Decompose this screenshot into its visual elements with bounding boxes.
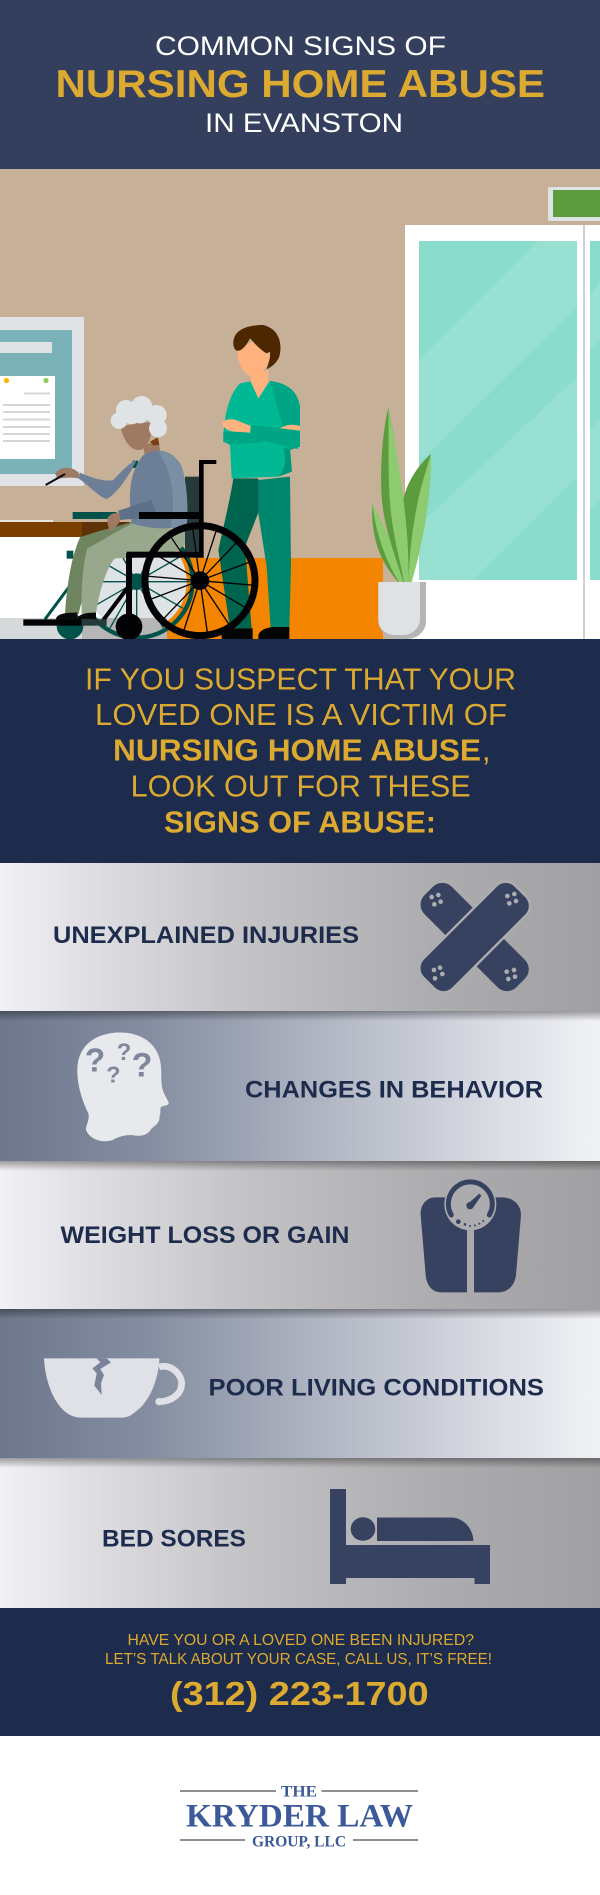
potted plant: [372, 407, 431, 639]
cta line 2: LET’S TALK ABOUT YOUR CASE, CALL US, IT’S FREE!: [105, 1651, 492, 1668]
label: POOR LIVING CONDITIONS: [208, 1375, 544, 1402]
title: common signs of: COMMON SIGNS OF: [155, 31, 446, 61]
desk: [0, 520, 130, 537]
wheelchair large wheel: [145, 526, 255, 636]
title: in evanston: IN EVANSTON: [205, 108, 403, 138]
call to action panel: [0, 1608, 600, 1736]
band: poor living conditions: [0, 1309, 600, 1458]
patient in wheelchair: [46, 396, 200, 619]
band: unexplained injuries: [0, 863, 600, 1011]
window: [405, 225, 600, 639]
label: UNEXPLAINED INJURIES: [53, 922, 359, 949]
notice board: [0, 317, 84, 486]
wheelchair rear wheel: [44, 546, 194, 639]
phone number: (312) 223-1700: [170, 1675, 429, 1712]
title: nursing home abuse: NURSING HOME ABUSE: [56, 63, 545, 106]
intro text line 5: SIGNS OF ABUSE:: [164, 806, 436, 840]
icon: person in bed: [330, 1489, 490, 1584]
logo: kryder law: KRYDER LAW: [186, 1799, 413, 1835]
intro text comma: ,: [482, 734, 490, 768]
intro text line 1: IF YOU SUSPECT THAT YOUR: [85, 662, 516, 696]
illustration: nursing home room: [0, 169, 600, 640]
logo: group llc: GROUP, LLC: [252, 1834, 346, 1851]
label: BED SORES: [102, 1526, 246, 1553]
intro text line 2: LOVED ONE IS A VICTIM OF: [95, 698, 507, 732]
exit sign: [548, 187, 600, 221]
header panel: [0, 0, 600, 169]
nurse: [218, 325, 300, 639]
icon: head with question marks: ?: [132, 1047, 152, 1085]
wheelchair frame and front wheel: [23, 460, 216, 640]
band: changes in behavior: [0, 1011, 600, 1161]
icon: head with question marks: ?: [117, 1039, 131, 1066]
icon: head with question marks: [77, 1032, 169, 1141]
band: bed sores: [0, 1458, 600, 1608]
icon: crossed bandages: [414, 876, 535, 998]
label: CHANGES IN BEHAVIOR: [245, 1077, 543, 1104]
label: WEIGHT LOSS OR GAIN: [60, 1222, 350, 1249]
intro panel: [0, 639, 600, 863]
band: weight loss or gain: [0, 1161, 600, 1309]
left floor and cabinet: [0, 532, 187, 639]
logo: the: THE: [281, 1784, 317, 1801]
orange floor: [167, 558, 383, 639]
icon: cracked cup: [44, 1358, 182, 1418]
intro text line 3: NURSING HOME ABUSE: [113, 734, 481, 768]
cta line 1: HAVE YOU OR A LOVED ONE BEEN INJURED?: [128, 1632, 474, 1649]
icon: head with question marks: ?: [106, 1062, 120, 1088]
icon: bathroom scale: [421, 1178, 521, 1292]
footer logo: [0, 1736, 600, 1895]
intro text line 4: LOOK OUT FOR THESE: [131, 770, 471, 804]
icon: head with question marks: ?: [85, 1043, 105, 1080]
